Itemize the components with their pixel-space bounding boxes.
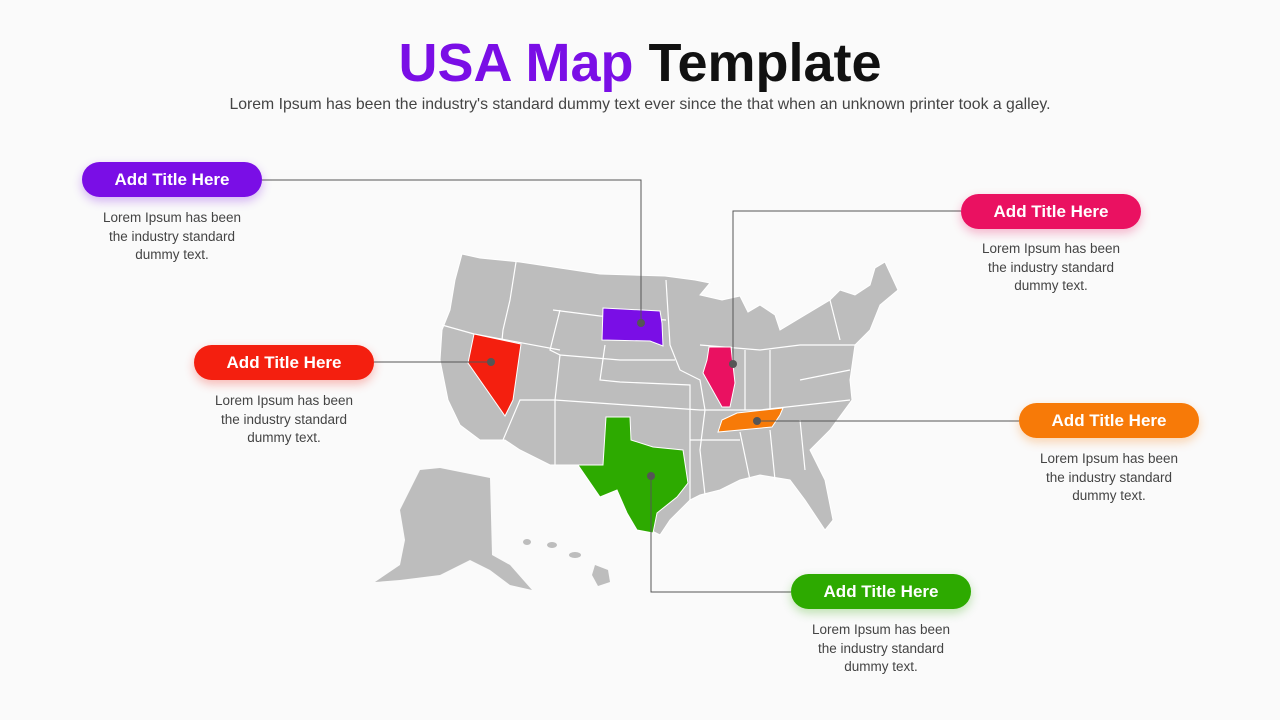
map: USA: [375, 254, 898, 590]
dots: [487, 319, 761, 480]
Hawaii: [523, 539, 610, 586]
callout: purple: [76, 160, 268, 262]
state: South Dakota: [602, 308, 663, 346]
text: the industry standard: [818, 640, 944, 656]
callout: pink: [956, 192, 1146, 293]
state: Texas: [578, 417, 688, 533]
text: Lorem Ipsum has been: [812, 622, 950, 637]
text: dummy text.: [135, 247, 209, 262]
subtitle: Lorem Ipsum has been the industry's standard dummy text ever since the that when an unknown printer took a galley.: [229, 96, 1051, 113]
connector lines: [262, 180, 1019, 592]
title: USA Map Template: [398, 33, 882, 93]
text: Add Title Here: [227, 353, 341, 372]
state: Illinois: [703, 347, 735, 407]
callout: orange: [1014, 401, 1204, 503]
text: Add Title Here: [824, 582, 938, 601]
text: the industry standard: [221, 412, 347, 426]
callout: red: [188, 343, 380, 445]
text: Add Title Here: [994, 202, 1108, 221]
text: the industry standard: [1046, 470, 1172, 484]
text: dummy text.: [1072, 488, 1146, 503]
text: dummy text.: [1014, 278, 1088, 293]
text: Lorem Ipsum has been: [1040, 451, 1178, 466]
text: dummy text.: [844, 659, 918, 674]
text: Lorem Ipsum has been: [982, 241, 1120, 256]
state: Tennessee: [718, 408, 783, 432]
text: the industry standard: [988, 260, 1114, 274]
text: dummy text.: [247, 430, 321, 445]
text: Lorem Ipsum has been: [215, 393, 353, 408]
state: Nevada: [468, 334, 521, 416]
text: the industry standard: [109, 228, 235, 244]
text: Lorem Ipsum has been: [103, 210, 241, 225]
Alaska: [375, 468, 532, 590]
callout: green: [786, 572, 976, 674]
text: Add Title Here: [1052, 411, 1166, 430]
text: Add Title Here: [115, 170, 229, 189]
